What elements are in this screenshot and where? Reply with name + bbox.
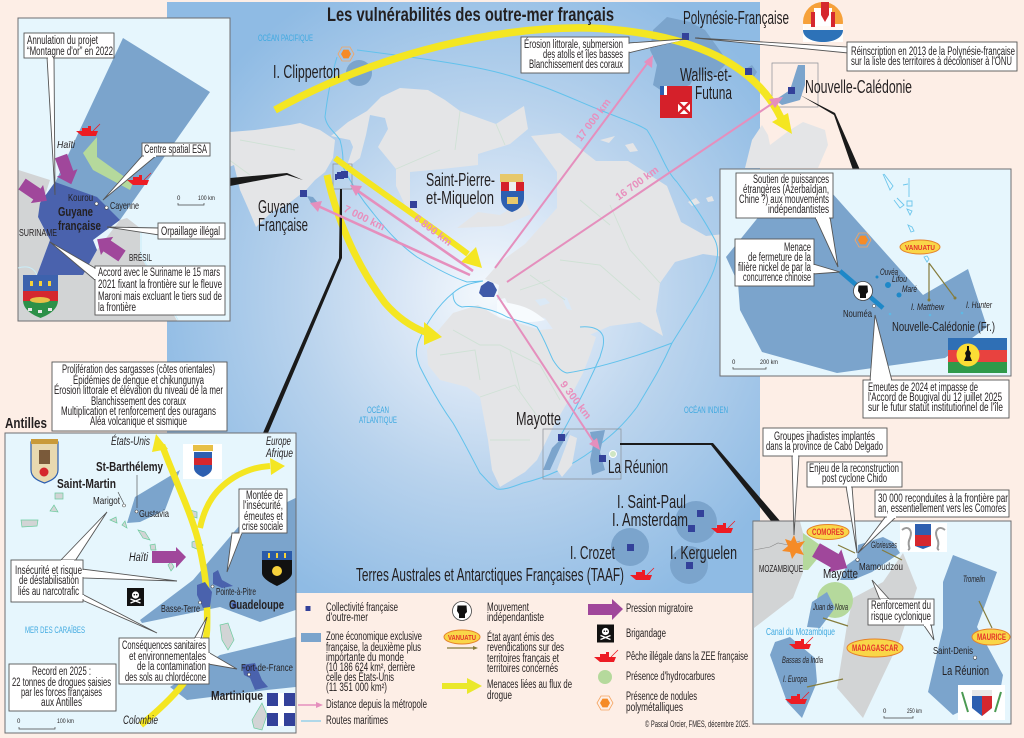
callout: insécurité Guadeloupe: l'insécurité,: [243, 500, 283, 512]
record box: aux Antilles: [41, 697, 82, 709]
callout: Montagne d'or: [24, 33, 114, 195]
callout: Accord Suriname: [50, 242, 225, 315]
scale: 100 km: [57, 719, 74, 725]
legend: drogue: [442, 678, 572, 702]
legend: brigandage: Brigandage: [626, 628, 666, 640]
ovals: MADAGASCAR: [852, 643, 898, 653]
emblem La Réunion: [958, 685, 1005, 720]
Antilles labels: Gustavia: [139, 508, 169, 520]
distance labels: 9 300 km: [557, 379, 594, 422]
shield Guyane: [23, 275, 58, 318]
Réunion hydrocarbon mark: [610, 450, 616, 458]
rivers: [18, 228, 178, 320]
boats: [76, 124, 100, 136]
map labels: Terres Australes et Antarctiques Françaises (TAAF): [356, 565, 624, 585]
labels Guyane: Cayenne: [110, 200, 139, 212]
NC labels: Maré: [902, 284, 917, 294]
labels Guyane: Haïti: [57, 139, 76, 151]
labels: [759, 540, 989, 684]
yellow drug flow: Antilles to Europe: [335, 158, 482, 268]
Guadeloupe islands: [197, 570, 237, 609]
distance labels: 7 000 km: [342, 203, 387, 233]
callout: décolonisation: [695, 38, 1017, 71]
yellow drug flow: Colombia to USA: [141, 434, 207, 725]
heading: Antilles: Antilles: [5, 415, 47, 432]
map labels: I. Crozet: [570, 543, 615, 563]
NC labels: I. Matthew: [911, 302, 944, 312]
scale: [177, 196, 215, 205]
callout: nickel: Menace: [784, 242, 811, 254]
callout: cyclone Chido: post cyclone Chido: [822, 473, 887, 485]
flag: Wallis-et-Futuna: [660, 86, 692, 118]
callout: nickel: concurrence chinoise: [743, 272, 811, 284]
legend: nodules: [597, 691, 697, 714]
callout: puissances étrangères: indépendantistes: [768, 204, 829, 216]
scale: [17, 719, 74, 729]
legend: ZEE: celle des États-Unis: [326, 671, 394, 684]
legend: fist: indépendantiste: [487, 612, 544, 624]
callout: risque cyclonique: risque cyclonique: [871, 611, 931, 623]
callout: narcotrafic: de déstabilisation: [19, 575, 79, 587]
Antilles labels: Europe: [266, 436, 291, 448]
legend: routes: [301, 715, 388, 727]
callout: risque cyclonique: [868, 580, 934, 640]
callout: insécurité Guadeloupe: Montée de: [246, 490, 283, 502]
callout: risque cyclonique: Renforcement du: [871, 600, 931, 612]
map labels: OCÉAN INDIEN: [684, 405, 728, 415]
scale: [732, 360, 778, 369]
city dots: [95, 202, 108, 209]
migratory arrow Haïti: [152, 547, 186, 568]
map labels: Française: [258, 215, 308, 235]
legend: revendications: revendications sur des: [487, 642, 564, 654]
callout: Accord Suriname: Maroni mais excluant le tiers sud de: [98, 291, 222, 303]
panel: Nouvelle-Calédonie: [720, 169, 1011, 376]
EEZ Guyane: [53, 38, 210, 220]
emblem Mayotte: [900, 523, 947, 552]
legend: nodules: Présence de nodules: [626, 691, 697, 703]
Antilles labels: Guadeloupe: [229, 598, 284, 612]
labels Guyane: française: [58, 219, 101, 233]
icon: Clipperton nodules: [338, 47, 354, 61]
labels: Saint-Denis: [933, 645, 973, 657]
Antilles labels: [25, 435, 293, 727]
boat 2: [785, 692, 809, 704]
callout: reconduites: [858, 490, 1009, 553]
yellow drug flow: Antilles to Africa: [327, 175, 442, 345]
legend: fist: [452, 602, 544, 624]
city dots: [856, 558, 977, 659]
map labels: Nouvelle-Calédonie: [805, 77, 912, 97]
legend: revendications: VANUATU: [448, 633, 476, 642]
legend: [298, 599, 750, 729]
labels: Juan de Nova: [812, 602, 848, 612]
emblem: Saint-Pierre-et-Miquelon: [500, 174, 524, 212]
callout: nickel: filière nickel de par la: [738, 262, 811, 274]
callout: Centre spatial: [103, 143, 210, 200]
map labels: OCÉAN PACIFIQUE: [258, 33, 313, 43]
legend: revendications: État ayant émis des: [487, 631, 554, 644]
panel: Mayotte et La Réunion: [753, 521, 1011, 724]
callout: jihadistes: [763, 428, 887, 535]
collectivity squares: [300, 33, 795, 569]
land: North America: [331, 88, 528, 213]
map labels: Mayotte: [516, 409, 561, 429]
map labels: Futuna: [695, 83, 733, 103]
legend: pêche: Pêche illégale dans la ZEE française: [626, 651, 748, 663]
callout: insécurité Guadeloupe: [227, 489, 287, 572]
Antilles labels: États-Unis: [111, 435, 150, 448]
NC labels: I. Hunter: [966, 300, 993, 310]
EEZ main map: [307, 17, 805, 584]
flag NC: [948, 338, 1007, 373]
legend: hydrocarbures: [598, 670, 715, 684]
scale: 0: [177, 196, 181, 202]
legend: distance: [298, 699, 427, 711]
distance labels: 6 800 km: [411, 212, 454, 249]
map labels: [258, 8, 912, 585]
callout: Montagne d'or: Annulation du projet: [27, 35, 99, 47]
land: South America: [167, 123, 335, 227]
map labels: Polynésie-Française: [683, 8, 789, 28]
icon: jihadist explosion: [782, 535, 805, 559]
map labels: I. Saint-Paul: [617, 492, 686, 512]
Mozambique: [754, 522, 803, 628]
callout: puissances étrangères: [736, 173, 838, 267]
labels: Glorieuses: [871, 540, 897, 550]
Grande Terre and islands: [840, 271, 963, 316]
Martinique: [242, 663, 268, 690]
Antilles labels: Basse-Terre: [161, 603, 200, 615]
legend: ZEE: importante du monde: [326, 652, 404, 664]
scale: 100 km: [198, 196, 215, 202]
callout: Centre spatial: Centre spatial ESA: [144, 144, 207, 156]
callout: vulnérabilités Antilles: Épidémies de dengue et chikungunya: [73, 374, 204, 387]
map labels: I. Clipperton: [273, 62, 340, 82]
legend: nodules: polymétalliques: [626, 702, 683, 714]
icon: brigandage: [127, 588, 144, 606]
legend: hydrocarbures: Présence d'hydrocarbures: [626, 671, 715, 683]
record box: [9, 664, 116, 711]
shield Saint-Martin: [31, 439, 58, 483]
icon: fist: [854, 282, 872, 300]
NC labels: [880, 267, 995, 334]
map labels: Guyane: [258, 197, 299, 217]
callout: émeutes NC: [863, 315, 1009, 418]
land: Africa: [427, 305, 596, 487]
legend: fist: Mouvement: [487, 602, 530, 614]
callout: vulnérabilités Antilles: Multiplication et renforcement des ouragans: [61, 406, 216, 418]
callout: puissances étrangères: Soutien de puissances: [753, 174, 829, 186]
labels Guyane: [19, 139, 152, 264]
Antilles labels: Fort-de-France: [241, 662, 293, 674]
callout: nickel: de fermeture de la: [748, 252, 811, 264]
callout: Accord Suriname: Accord avec le Suriname le 15 mars: [98, 267, 220, 279]
callout: vulnérabilités Antilles: Prolifération des sargasses (côtes orientales): [62, 364, 215, 376]
labels: MOZAMBIQUE: [759, 563, 803, 575]
France: [479, 281, 497, 297]
boat 2: [127, 173, 151, 185]
land: Eurasia: [485, 133, 760, 340]
neighbouring land: [18, 170, 177, 320]
Nouméa: [843, 304, 876, 320]
callout: Polynésie vulnerabilities: [521, 37, 686, 73]
olive claim arrows: [807, 545, 992, 687]
migratory pressure arrows: [16, 152, 128, 265]
callout: vulnérabilités Antilles: Blanchissement des coraux: [91, 396, 186, 408]
callout: insécurité Guadeloupe: crise sociale: [242, 521, 283, 533]
map labels: I. Amsterdam: [612, 510, 688, 530]
labels: Bassas da India: [782, 655, 823, 665]
callout: Accord Suriname: 2021 fixant la frontière sur le fleuve: [98, 279, 222, 291]
labels: I. Europa: [783, 674, 807, 684]
callout: Montagne d'or: “Montagne d'or” en 2022: [27, 46, 113, 58]
maritime routes: [325, 50, 718, 489]
legend: pression migratoire: Pression migratoire: [626, 603, 693, 615]
callout: chlordécone: des sols au chlordécone: [125, 672, 206, 684]
ovals: [807, 524, 1010, 657]
record box: Record en 2025 :: [32, 666, 91, 678]
callout: jihadistes: Groupes jihadistes implantés: [774, 431, 875, 443]
land: Greenland fragment: [457, 200, 531, 228]
callout: cyclone Chido: [807, 462, 902, 553]
callout: nickel: [735, 239, 840, 286]
ovals: COMORES: [812, 527, 844, 537]
hydrocarbons: [803, 533, 853, 618]
country borders: [188, 111, 660, 440]
map labels: Wallis-et-: [680, 65, 732, 85]
legend: ZEE: (11 351 000 km²): [326, 682, 387, 694]
record box: 22 tonnes de drogues saisies: [12, 677, 111, 689]
callout: cyclone Chido: Enjeu de la reconstruction: [809, 463, 899, 475]
Inland seas: [535, 296, 572, 310]
labels: La Réunion: [942, 664, 989, 678]
panel: Antilles: [5, 433, 296, 733]
callout: Accord Suriname: la frontière: [98, 302, 136, 314]
land: islands: [600, 136, 714, 270]
hydrocarbon zone: [83, 137, 133, 190]
ovals: MAURICE: [977, 632, 1006, 642]
Antilles labels: Saint-Martin: [57, 477, 116, 491]
legend: revendications: territoires français et: [487, 653, 560, 665]
EEZ NC: [726, 193, 987, 373]
legend: brigandage: [597, 624, 666, 642]
scale: 200 km: [760, 360, 778, 366]
callout: vulnérabilités Antilles: [52, 362, 227, 431]
emblem Saint-Barthélemy: [183, 444, 222, 479]
labels: Mayotte: [823, 567, 858, 581]
legend: collectivité: Collectivité française: [326, 602, 398, 614]
legend: collectivité: [306, 602, 398, 624]
labels Guyane: SURINAME: [19, 227, 57, 239]
emblem: Polynésie: [803, 2, 843, 42]
NC labels: Lifou: [892, 274, 907, 284]
migratory arrow: [809, 539, 854, 579]
callout: Orpaillage: [107, 223, 225, 239]
scale: 250 km: [907, 709, 922, 715]
legend: pêche: [594, 650, 748, 663]
legend: collectivité: d'outre-mer: [326, 612, 368, 624]
callout: narcotrafic: Insécurité et risque: [15, 565, 82, 577]
scale: 0: [732, 360, 736, 366]
legend: ZEE: (10 186 624 km², derrière: [326, 662, 415, 674]
record box: par les forces françaises: [21, 687, 102, 699]
callout: narcotrafic: liés au narcotrafic: [18, 586, 79, 598]
Antilles labels: St-Barthélemy: [96, 460, 163, 474]
map labels: I. Kerguelen: [670, 543, 737, 563]
Vanuatu islands outlines: [883, 174, 929, 262]
callout: chlordécone: Conséquences sanitaires: [122, 640, 206, 652]
map labels: La Réunion: [608, 457, 668, 477]
legend: routes: Routes maritimes: [326, 715, 388, 727]
Antilles labels: Marigot: [93, 495, 120, 507]
scale: [883, 709, 922, 718]
callout: puissances étrangères: Chine ?) aux mouvements: [739, 194, 829, 206]
callout: chlordécone: de la contamination: [137, 661, 206, 673]
legend: pression migratoire: [588, 599, 693, 620]
distance labels: [342, 97, 661, 422]
callout: insécurité Guadeloupe: émeutes et: [244, 511, 284, 523]
NC labels: Ouvéa: [880, 267, 898, 277]
legend: revendications: territoires concernés: [487, 663, 558, 675]
yellow drug flow: to Europe/Africa: [200, 458, 285, 528]
distance labels: 17 000 km: [574, 97, 614, 144]
map labels: ATLANTIQUE: [359, 415, 397, 425]
copyright: © Pascal Orcier, FMES, décembre 2025.: [645, 719, 750, 729]
Antilles labels: MER DES CARAÏBES: [25, 625, 85, 635]
Antilles labels: Haïti: [129, 552, 148, 564]
city dots & leaders: [118, 475, 251, 676]
boats: [789, 637, 813, 649]
callout: chlordécone: [119, 617, 237, 684]
shield Guadeloupe: [262, 551, 292, 586]
callout: chlordécone: et environnementales: [129, 651, 206, 663]
world map panel: [167, 2, 912, 593]
islands: [21, 493, 267, 730]
legend: ZEE: [301, 631, 422, 694]
callout: jihadistes: dans la province de Cabo Delgado: [766, 441, 883, 453]
Antilles labels: Colombie: [123, 715, 158, 727]
Antilles labels: Martinique: [211, 689, 263, 703]
callout: Orpaillage: Orpaillage illégal: [161, 226, 220, 238]
territory Guyane: [37, 182, 120, 275]
Vanuatu claim: VANUATU: [905, 243, 935, 252]
callout: puissances étrangères: étrangères (Azerbaïdjan,: [743, 184, 829, 196]
inset frames: [333, 63, 818, 479]
labels: Tromelin: [963, 574, 985, 584]
land: Australia: [745, 122, 828, 168]
scale: 0: [17, 719, 21, 725]
legend: revendications: [444, 630, 564, 675]
legend: drogue: drogue: [487, 690, 512, 702]
labels Guyane: Kourou: [68, 192, 93, 204]
Madagascar: [837, 553, 917, 718]
yellow drug flow: Pacific arc: [275, 28, 792, 134]
callout lines to insets: [230, 95, 860, 521]
boats TAAF: [630, 521, 735, 580]
scale: 0: [883, 709, 887, 715]
legend: ZEE: française, la deuxième plus: [326, 642, 421, 654]
callout: vulnérabilités Antilles: Érosion littorale et élévation du niveau de la mer: [54, 384, 223, 397]
title: Les vulnérabilités des outre-mer français: [327, 5, 614, 26]
distance labels: 16 700 km: [613, 164, 661, 203]
Cabo Delgado border: [754, 541, 800, 550]
EEZ Antilles: [127, 470, 296, 700]
land: Mediterranean gap: [497, 300, 545, 322]
labels Guyane: Guyane: [58, 205, 93, 219]
callout: Polynésie vulnerabilities: Blanchissement des coraux: [529, 59, 623, 71]
callout: Polynésie vulnerabilities: Érosion littorale, submersion: [524, 38, 623, 51]
Antilles labels: Pointe-à-Pitre: [216, 586, 256, 598]
NC labels: Nouvelle-Calédonie (Fr.): [892, 320, 995, 334]
callout: narcotrafic: [11, 512, 177, 633]
labels: Canal du Mozambique: [766, 626, 835, 638]
map labels: Saint-Pierre-: [426, 170, 495, 190]
Nouméa: Nouméa: [843, 308, 872, 320]
callout: vulnérabilités Antilles: Aléa volcanique et sismique: [90, 416, 187, 428]
icon: nodules: [855, 233, 871, 247]
legend: drogue: Menaces liées au flux de: [487, 679, 572, 691]
flag Martinique: [267, 693, 295, 726]
legend: distance: Distance depuis la métropole: [326, 699, 427, 711]
Vanuatu claim: [900, 240, 956, 302]
map labels: et-Miquelon: [426, 188, 494, 208]
pink distance arrows: [310, 55, 783, 450]
legend: ZEE: Zone économique exclusive: [326, 631, 422, 643]
ZEE Mayotte etc: [770, 537, 1003, 718]
Antilles labels: Afrique: [265, 448, 293, 460]
callout: Polynésie vulnerabilities: des atolls et îles basses: [543, 49, 623, 61]
labels: Mamoudzou: [859, 561, 903, 573]
panel: Guyane: [16, 18, 230, 321]
map labels: OCÉAN: [367, 405, 389, 415]
labels Guyane: BRÉSIL: [129, 251, 152, 264]
